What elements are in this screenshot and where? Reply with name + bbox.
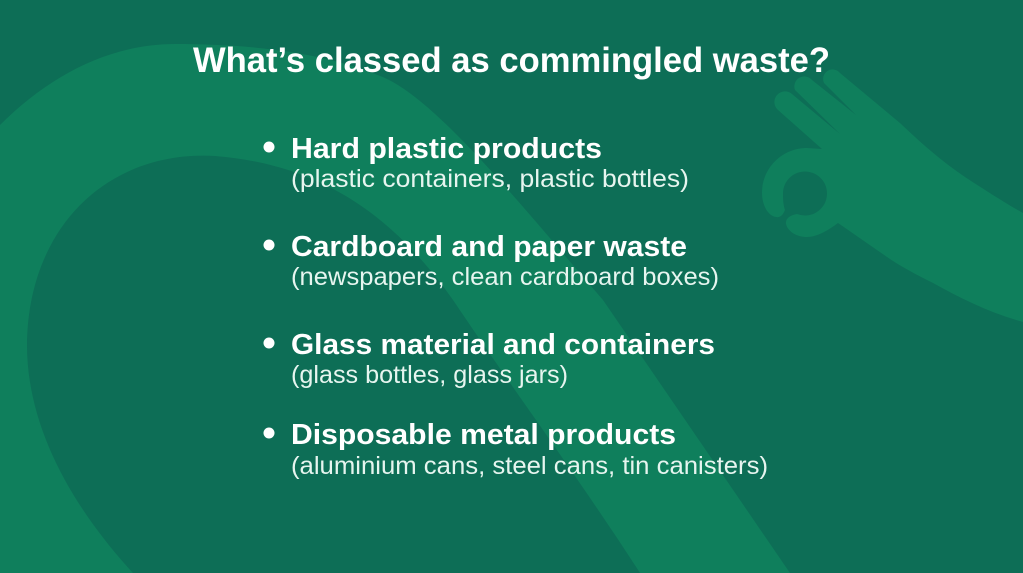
list item: cardboard and paper xyxy=(264,231,719,291)
list item: glass: Glass material and containers xyxy=(291,329,715,361)
list item: glass: (glass bottles, glass jars) xyxy=(291,361,568,389)
list item: metal: Disposable metal products xyxy=(291,419,676,451)
list item: hard plastic: (plastic containers, plastic bottles) xyxy=(291,165,689,193)
icon: OK hand xyxy=(762,69,1023,322)
title: What’s classed as commingled waste? xyxy=(193,41,830,80)
list item: glass xyxy=(264,329,715,389)
list item: cardboard and paper: Cardboard and paper waste xyxy=(291,231,687,263)
list item: metal: (aluminium cans, steel cans, tin canisters) xyxy=(291,452,768,480)
decorative arm band xyxy=(0,44,790,573)
list item: metal xyxy=(264,419,768,480)
list item: hard plastic: Hard plastic products xyxy=(291,133,602,165)
list item: cardboard and paper: (newspapers, clean cardboard boxes) xyxy=(291,263,719,291)
list item: hard plastic xyxy=(264,133,689,193)
